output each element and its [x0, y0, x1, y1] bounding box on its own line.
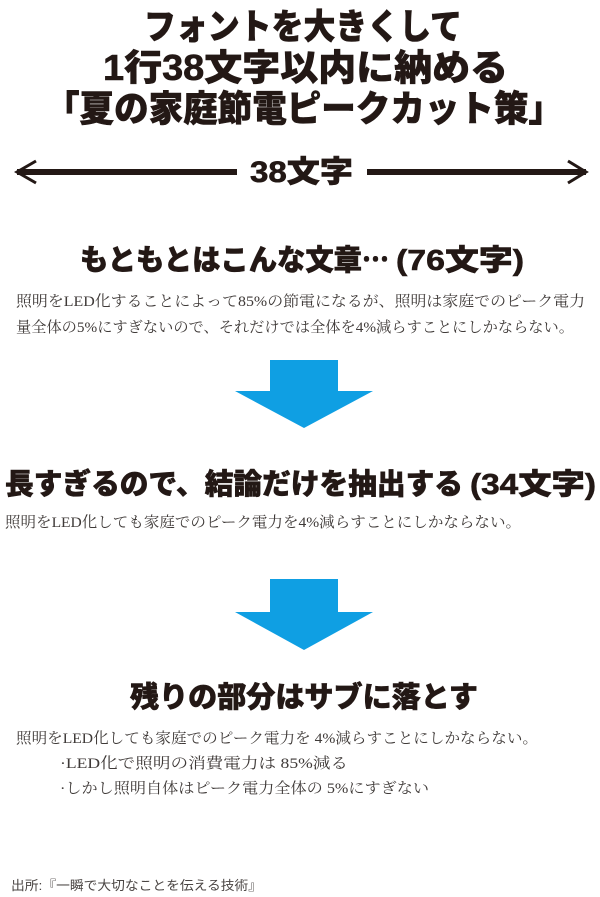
heading: original sentence: (76文字)	[396, 244, 524, 277]
text block: original 76 character sentence: 照明をLED化することによって85%の節電になるが、照明は家庭でのピーク電力	[16, 292, 585, 310]
heading: original sentence: もともとはこんな文章	[80, 244, 362, 277]
source credit: 出所:『一瞬で大切なことを伝える技術』	[11, 878, 262, 893]
heading: original sentence: …	[362, 237, 389, 279]
text block: conclusion with sub points: 照明をLED化しても家庭でのピーク電力を 4%減らすことにしかならない。	[16, 729, 538, 747]
title: 1行38文字以内に納める	[103, 47, 508, 88]
arrow: down 1	[235, 360, 373, 428]
arrow: 38 characters width	[17, 156, 586, 189]
text block: conclusion with sub points	[16, 729, 538, 797]
arrow: 38 characters width: 38文字	[250, 156, 353, 189]
heading: extract the conclusion: (34文字)	[470, 468, 596, 501]
title: 「夏の家庭節電ピークカット策」	[45, 88, 563, 129]
heading: original sentence	[80, 237, 524, 279]
text block: original 76 character sentence	[16, 292, 585, 336]
text block: 34 character conclusion: 照明をLED化しても家庭でのピーク電力を4%減らすことにしかならない。	[5, 513, 521, 531]
text block: conclusion with sub points: ·しかし照明自体はピーク電力全体の 5%にすぎない	[60, 780, 429, 797]
arrow: down 2	[235, 579, 373, 650]
heading: extract the conclusion: 長すぎるので、結論だけを抽出する	[5, 467, 463, 501]
text block: original 76 character sentence: 量全体の5%にすぎないので、それだけでは全体を4%減らすことにしかならない。	[16, 319, 574, 336]
heading: move the rest to sub points: 残りの部分はサブに落とす	[130, 680, 478, 714]
title	[45, 8, 563, 129]
title: フォントを大きくして	[144, 8, 462, 47]
text block: conclusion with sub points: ·LED化で照明の消費電力は 85%減る	[60, 754, 348, 772]
